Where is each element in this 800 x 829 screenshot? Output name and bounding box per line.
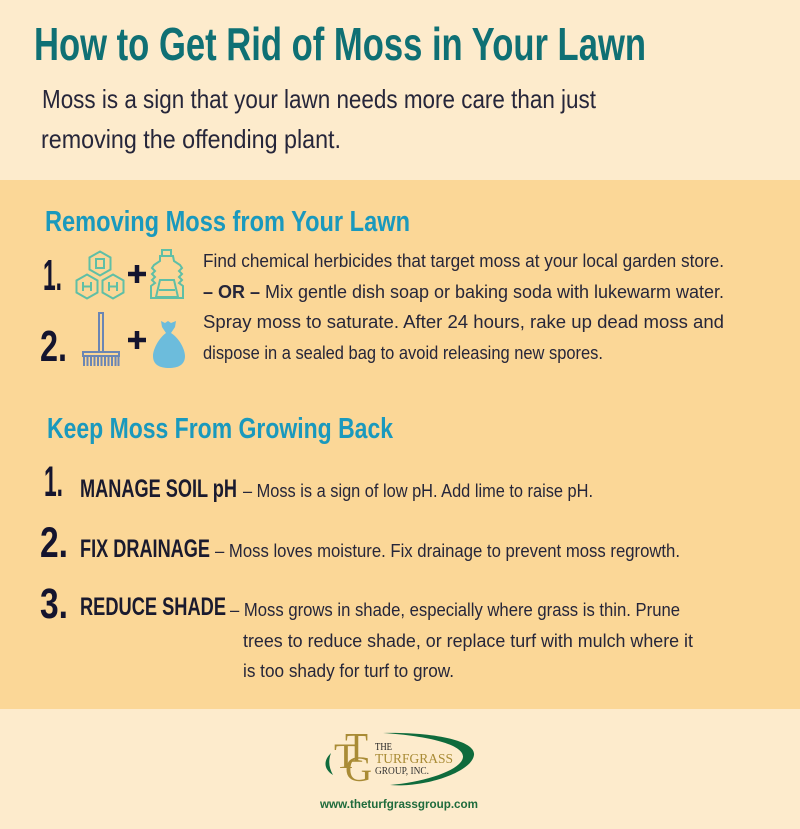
logo [325,726,474,789]
number 1: 1. [43,251,62,300]
panel: instructions band [0,180,800,709]
removal instructions [203,250,724,363]
step 2: 2. [40,519,68,567]
step 3: REDUCE SHADE [80,593,226,621]
logo monogram: T [334,736,358,776]
icon: plus [128,331,146,349]
removal instructions: Spray moss to saturate. After 24 hours, rake up dead moss and [203,311,724,332]
website url: www.theturfgrassgroup.com [319,799,478,811]
intro text: Moss is a sign that your lawn needs more care than just [42,84,597,114]
step 3 [40,580,693,681]
removal instructions: – OR – Mix gentle dish soap or baking soda with lukewarm water. [203,281,724,302]
step 1: 1. [44,458,63,506]
removal instructions: dispose in a sealed bag to avoid releasing new spores. [203,342,603,363]
logo wordmark [375,742,453,777]
icon: plus [128,265,146,283]
number 2: 2. [40,322,67,371]
intro text: removing the offending plant. [41,124,341,154]
step 2 [40,519,680,567]
step 2: – Moss loves moisture. Fix drainage to prevent moss regrowth. [215,540,680,561]
heading: removing moss: Removing Moss from Your Lawn [45,206,410,238]
icon: chemical hexagons [76,252,124,298]
step 3: 3. [40,580,68,628]
step 1: – Moss is a sign of low pH. Add lime to raise pH. [243,480,593,501]
step 3: – Moss grows in shade, especially where grass is thin. Prune [230,599,680,620]
icon: rake [83,313,119,366]
logo monogram: T [345,726,368,772]
removal instructions: Find chemical herbicides that target moss at your local garden store. [203,250,724,271]
step 3: trees to reduce shade, or replace turf with mulch where it [243,630,693,651]
logo wordmark: THE [375,742,392,753]
icon: bag [153,321,185,368]
heading: keep moss away: Keep Moss From Growing Back [47,413,394,445]
logo monogram [334,726,372,789]
step 3: is too shady for turf to grow. [243,660,454,681]
logo swoosh [383,733,474,785]
logo monogram: G [345,749,372,789]
step 2: FIX DRAINAGE [80,535,210,563]
intro text [41,84,597,154]
logo wordmark: TURFGRASS [375,752,453,767]
step 1: MANAGE SOIL pH [80,475,237,503]
logo wordmark: GROUP, INC. [375,765,429,777]
icon: spray bottle [151,250,183,298]
step 1 [44,458,593,506]
